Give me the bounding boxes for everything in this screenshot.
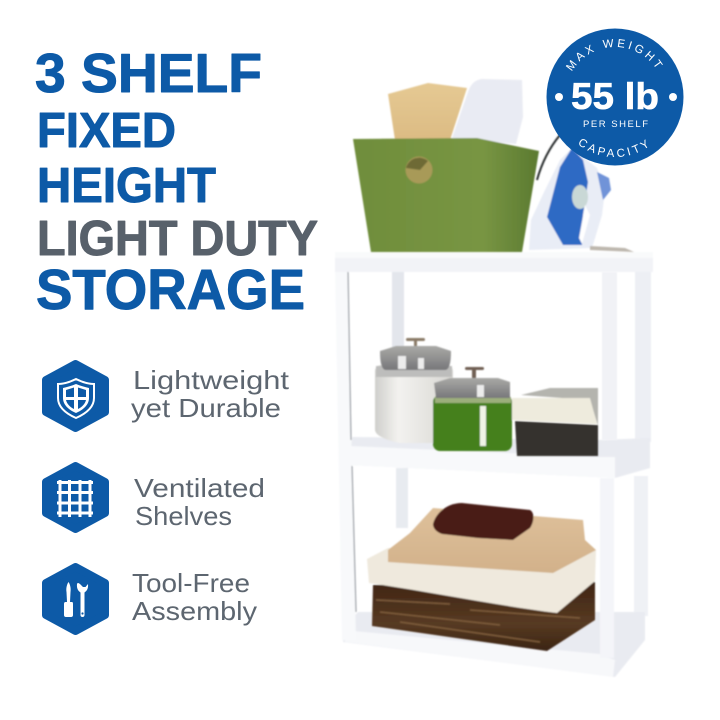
title: 3 SHELF <box>35 42 262 104</box>
badge top arc text: MAX WEIGHT <box>566 39 663 71</box>
text: tool-free assembly <box>132 568 257 626</box>
text: ventilated shelves: Shelves <box>135 501 232 531</box>
badge weight: 55 lb <box>571 76 659 117</box>
badge bottom arc text: CAPACITY <box>579 139 648 157</box>
wicker basket <box>372 582 595 651</box>
title <box>35 42 318 322</box>
text: tool-free assembly: Tool-Free <box>132 568 250 598</box>
title: LIGHT DUTY <box>37 212 318 266</box>
basket liner <box>367 548 596 613</box>
middle shelf <box>350 437 650 478</box>
badge dot left <box>555 93 563 101</box>
items: bottom shelf <box>367 503 596 651</box>
text: lightweight yet durable: Lightweight <box>133 365 290 395</box>
green jar <box>433 367 512 451</box>
tan blanket <box>388 508 596 573</box>
iron <box>529 148 634 252</box>
feature: lightweight yet durable <box>46 364 290 428</box>
green basket <box>353 138 539 252</box>
badge: max weight <box>546 28 684 166</box>
text: ventilated shelves: Ventilated <box>134 473 265 503</box>
iron cord <box>537 135 560 180</box>
top shelf <box>335 252 653 272</box>
shelf unit <box>335 252 653 677</box>
icon: shield hexagon <box>46 364 105 428</box>
white roll <box>452 79 523 144</box>
text: ventilated shelves <box>134 473 265 531</box>
title: FIXED <box>37 104 176 158</box>
title: STORAGE <box>36 258 305 322</box>
white jar <box>375 338 453 443</box>
text: lightweight yet durable: yet Durable <box>131 393 281 423</box>
folded towels <box>512 388 598 456</box>
icon: tools hexagon <box>46 567 105 631</box>
bottom shelf <box>343 612 645 677</box>
front right legs <box>600 272 617 658</box>
feature: tool-free assembly <box>46 567 257 631</box>
brown towel <box>433 503 533 540</box>
rear posts <box>392 272 651 616</box>
text: tool-free assembly: Assembly <box>132 596 257 626</box>
icon: grid hexagon <box>46 466 105 529</box>
tan cloth <box>388 83 467 140</box>
front left leg <box>335 268 356 640</box>
title: HEIGHT <box>37 159 216 213</box>
items: middle shelf <box>375 338 598 456</box>
text: lightweight yet durable <box>131 365 290 423</box>
badge per shelf: PER SHELF <box>583 119 648 130</box>
badge dot right <box>669 93 677 101</box>
items: top shelf <box>353 79 634 252</box>
feature: ventilated shelves <box>46 466 265 531</box>
